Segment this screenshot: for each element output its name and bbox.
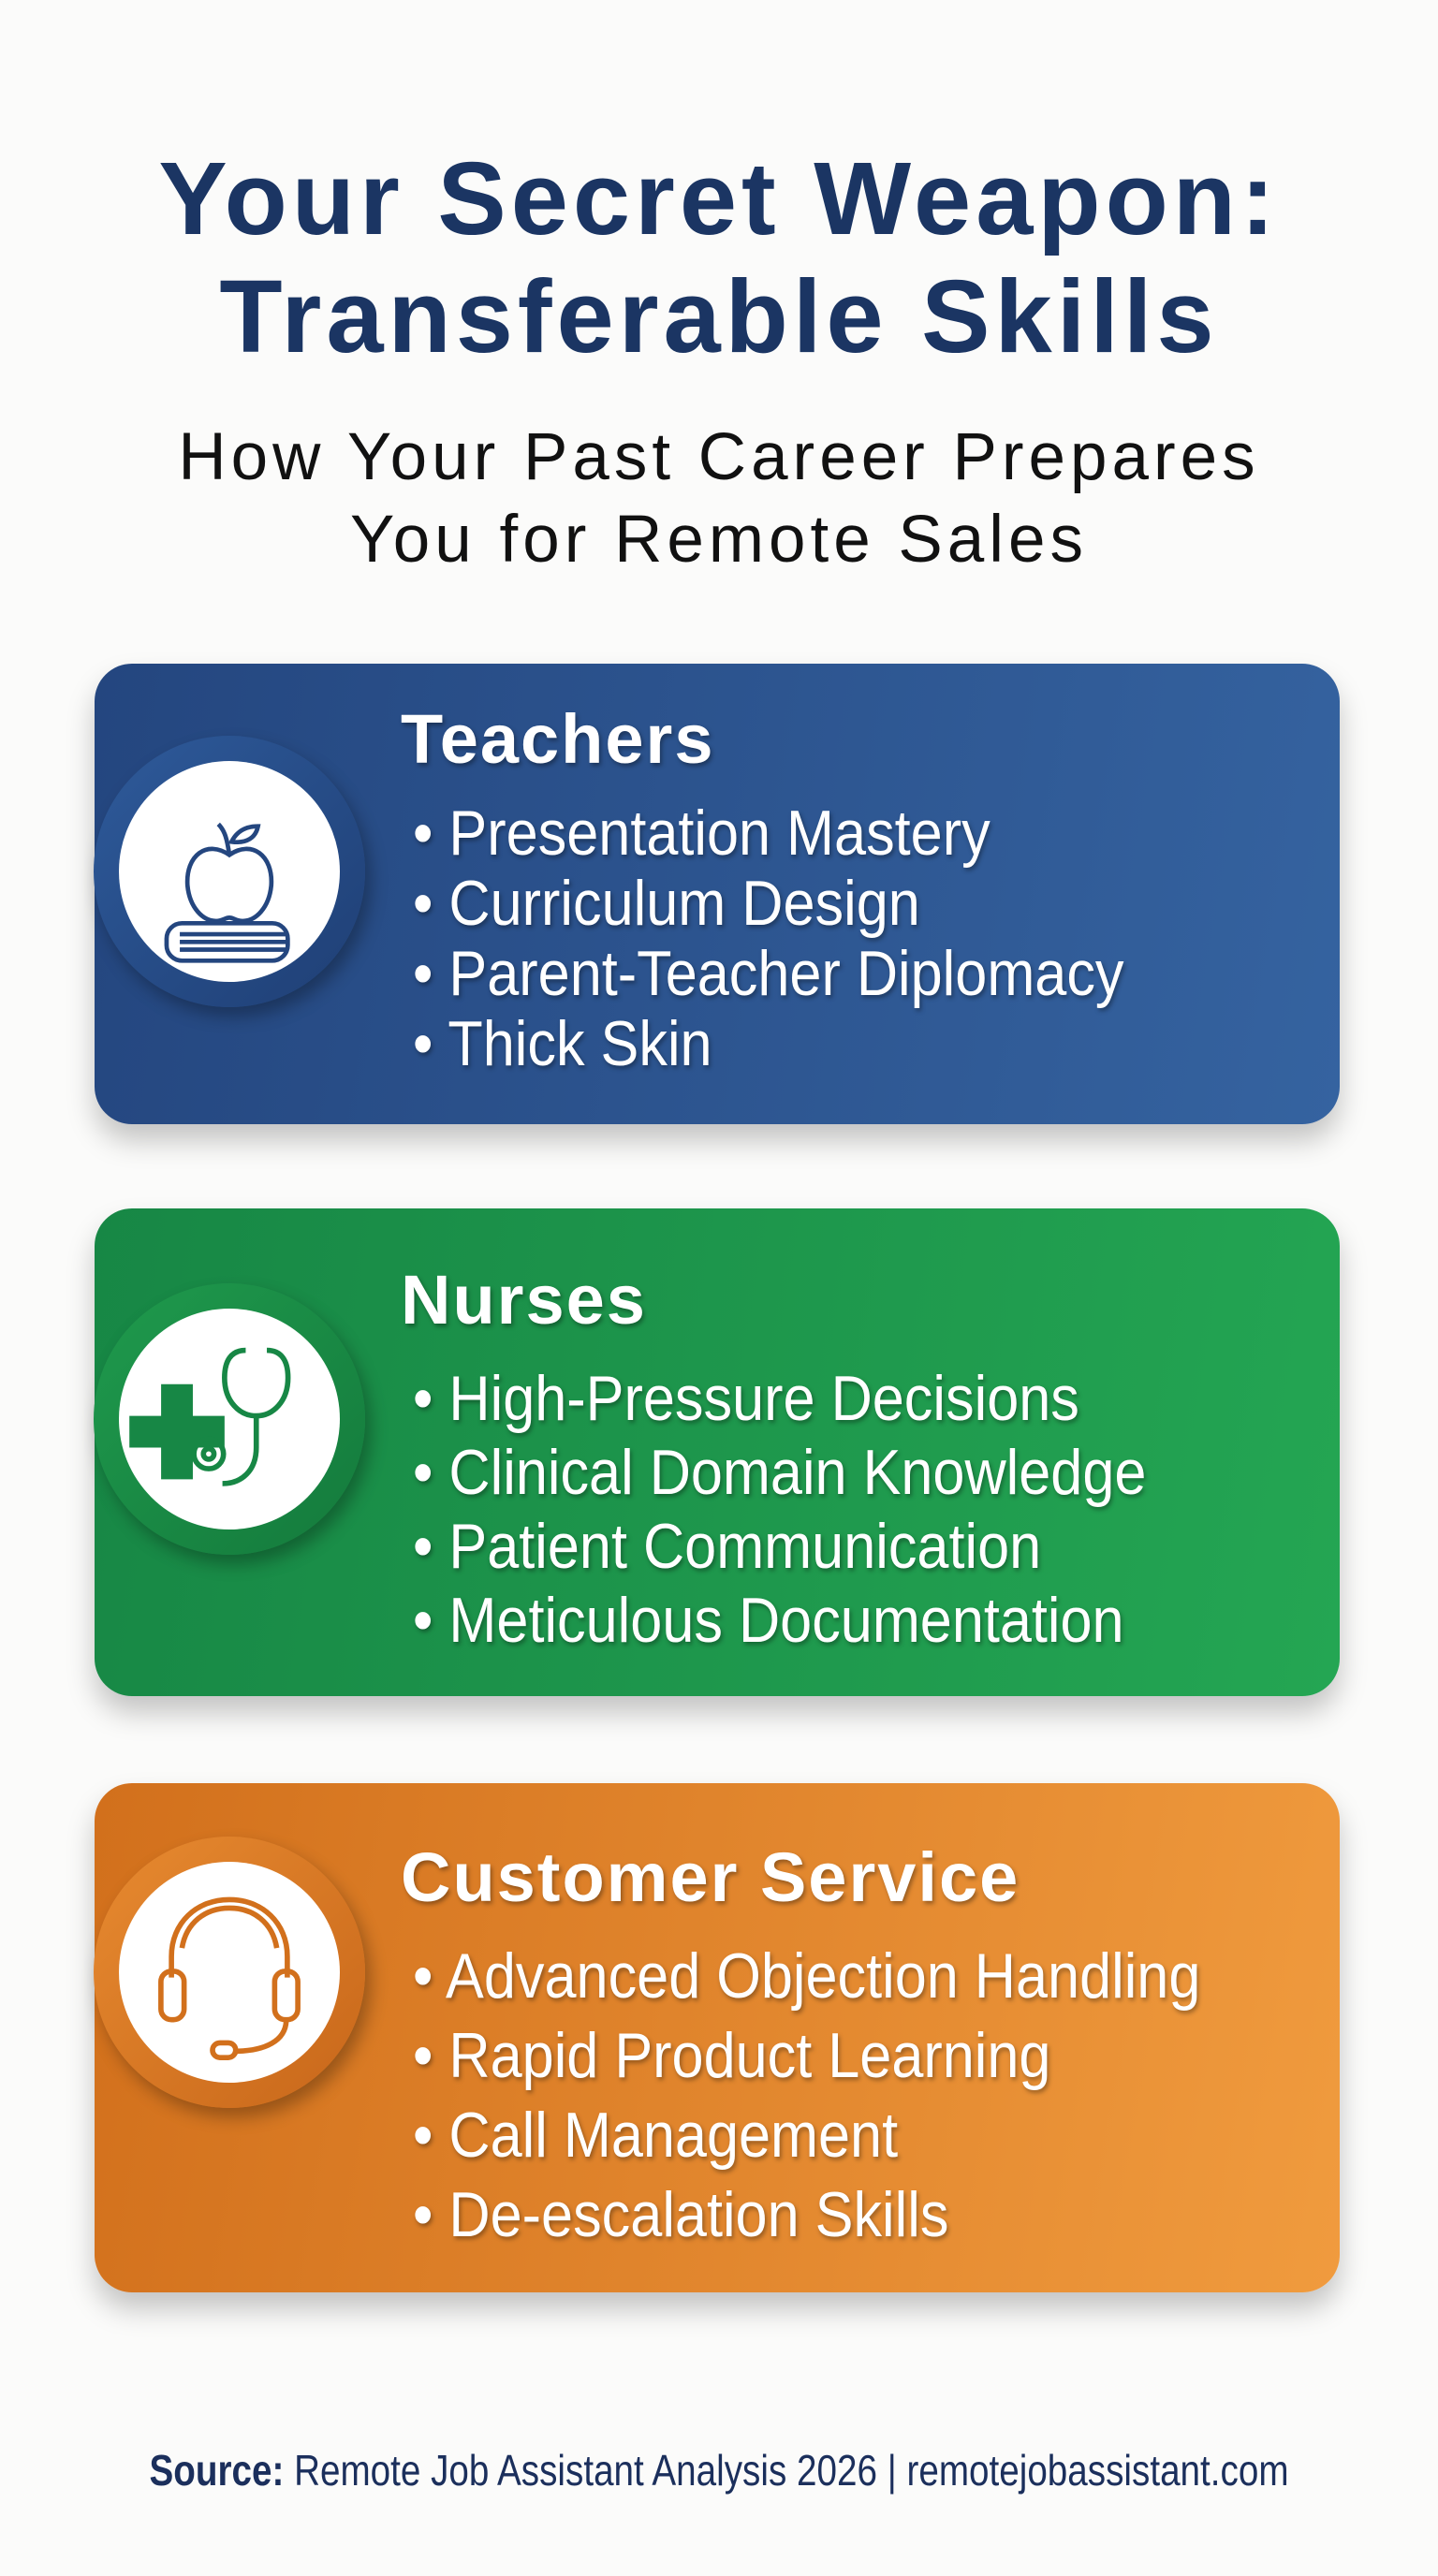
skills list: customer service: • Rapid Product Learning (413, 2020, 1050, 2091)
skills list: customer service: • Advanced Objection Handling (413, 1940, 1200, 2012)
heading: teachers: Teachers (401, 700, 715, 778)
subtitle: How Your Past Career Prepares (178, 420, 1260, 494)
skills list: nurses: • Meticulous Documentation (413, 1585, 1124, 1656)
skills list: teachers: • Parent-Teacher Diplomacy (413, 938, 1124, 1009)
subtitle (178, 420, 1260, 577)
skills list: teachers: • Presentation Mastery (413, 798, 990, 869)
heading: customer service: Customer Service (401, 1838, 1020, 1916)
icon: apple on books (94, 736, 365, 1007)
skills list: nurses (413, 1363, 1148, 1656)
title: Your Secret Weapon: (158, 141, 1280, 256)
skills list: nurses: • Clinical Domain Knowledge (413, 1437, 1146, 1508)
skills list: customer service (413, 1940, 1201, 2250)
source footer: Source: Remote Job Assistant Analysis 2026 | remotejobassistant.com (149, 2446, 1289, 2495)
skills list: teachers: • Curriculum Design (413, 868, 920, 939)
panel: nurses (95, 1208, 1340, 1696)
skills list: customer service: • Call Management (413, 2100, 898, 2171)
skills list: teachers (413, 798, 1127, 1079)
title (158, 141, 1280, 374)
skills list: nurses: • Patient Communication (413, 1511, 1041, 1582)
panel: customer service (95, 1783, 1340, 2292)
icon: headset (94, 1837, 365, 2108)
subtitle: You for Remote Sales (350, 503, 1088, 577)
skills list: teachers: • Thick Skin (413, 1008, 712, 1079)
heading: nurses: Nurses (401, 1261, 647, 1339)
skills list: nurses: • High-Pressure Decisions (413, 1363, 1079, 1434)
skills list: customer service: • De-escalation Skills (413, 2179, 948, 2250)
title: Transferable Skills (219, 259, 1219, 374)
panel: teachers (95, 664, 1340, 1124)
icon: medical cross and stethoscope (94, 1283, 365, 1555)
